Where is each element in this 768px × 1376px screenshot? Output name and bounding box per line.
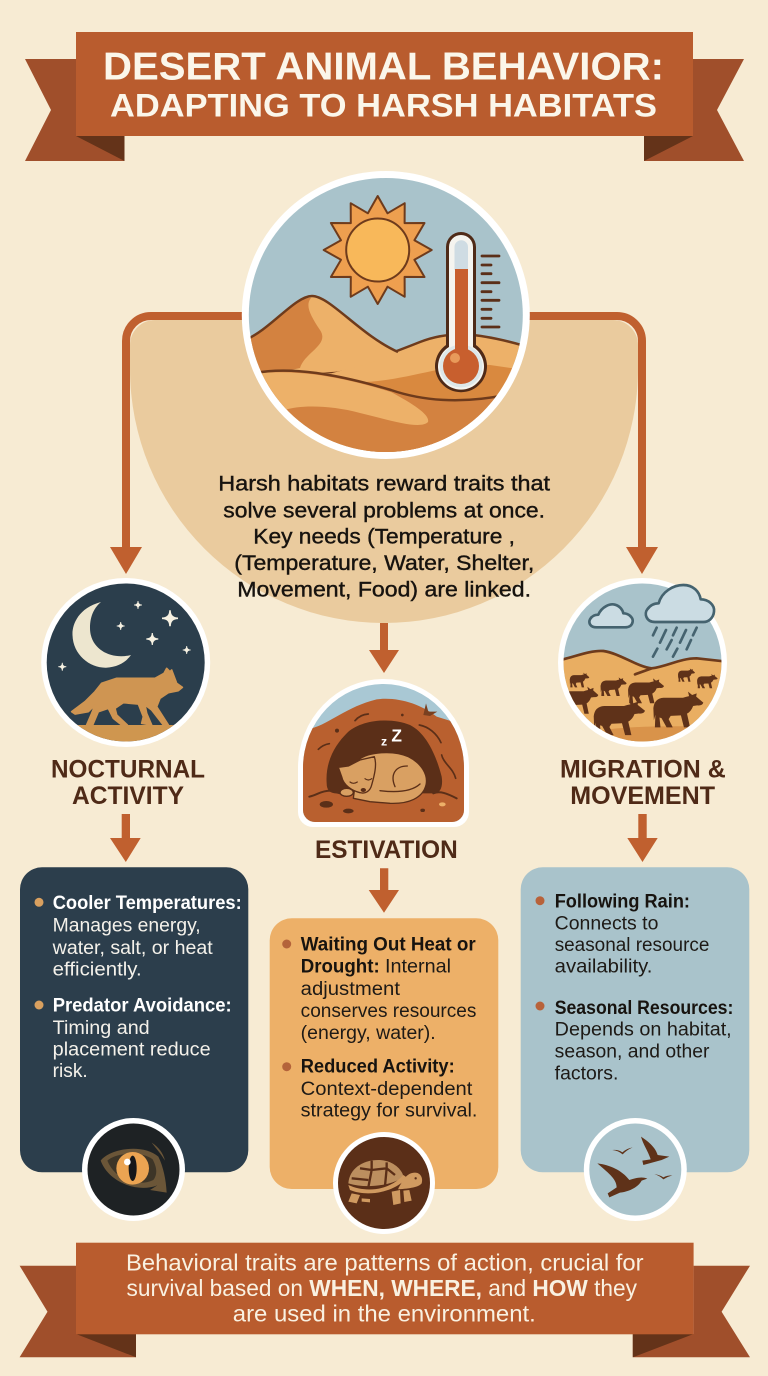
heading: nocturnal activity: ACTIVITY [72,782,184,810]
icon: sleep letters: Z [391,726,402,746]
arrow: right branch [626,547,658,574]
heading: estivation: ESTIVATION [315,836,458,864]
bullet: predator avoidance: placement reduce [53,1040,211,1061]
bullet: predator avoidance: Timing and [53,1018,150,1039]
icon: sleep letters: z [381,734,387,748]
bullet: following rain: Connects to [555,913,658,934]
bullet: cooler temperatures: Cooler Temperatures: [53,893,242,914]
bullet: predator avoidance: Predator Avoidance: [53,996,232,1017]
heading: migration and movement [560,755,726,810]
bullet: cooler temperatures: efficiently. [53,960,142,981]
footer text: survival based on WHEN, WHERE, and HOW they [126,1275,637,1301]
icon: night sky with fox [40,578,210,755]
bullet: waiting out heat or drought [282,935,476,1044]
text block: central intro: solve several problems at once. [223,498,545,522]
icon: sleeping animal [338,753,426,803]
text block: central intro: (Temperature, Water, Shelter, [234,551,534,575]
bullet: predator avoidance [34,996,232,1082]
icon: large rain cloud [646,585,714,622]
footer text: are used in the environment. [233,1301,536,1327]
icon: burrow with sleeping animal [298,679,469,827]
panel: central intro shape with branching connector [110,316,658,623]
icon: flying birds [584,1118,687,1221]
bullet: seasonal resources: season, and other [555,1041,710,1062]
bullet: reduced activity: Context-dependent [301,1079,473,1100]
panel: nocturnal activity details [20,867,248,1172]
icon: herd of animals [562,668,718,735]
bullet: following rain [536,891,709,978]
text block: central intro: Key needs (Temperature , [253,524,515,548]
footer text: Behavioral traits are patterns of action, crucial for [126,1250,644,1276]
title line 1: DESERT ANIMAL BEHAVIOR: [103,46,664,88]
heading: nocturnal activity [51,755,205,810]
bullet: seasonal resources: factors. [555,1063,618,1084]
bullet: waiting out heat or drought: (energy, water). [301,1023,436,1044]
heading: migration and movement: MIGRATION & [560,755,726,783]
icon: thermometer [435,232,499,392]
icon: small cloud [589,604,633,627]
title banner [25,32,744,161]
bullet: seasonal resources: Depends on habitat, [555,1020,732,1041]
icon: rain clouds and migrating herd [558,578,728,750]
bullet: waiting out heat or drought: conserves resources [301,1001,476,1022]
arrow: migration to panel [627,814,658,862]
icon: sand dunes [250,294,520,452]
bullet: cooler temperatures: Manages energy, [53,916,201,937]
icon: sand hills [564,652,722,742]
bullet: following rain: availability. [555,957,652,978]
bullet: reduced activity: strategy for survival. [301,1101,477,1122]
text block: central intro: Movement, Food) are linked. [237,578,531,602]
panel: estivation details [270,918,498,1189]
bullet: reduced activity [282,1057,477,1122]
icon: crescent moon [72,602,131,668]
icon: sun [324,196,432,304]
arrow: left branch [110,547,142,574]
icon: fox silhouette [72,668,182,725]
icon: tortoise [333,1132,435,1234]
text block: central intro: Harsh habitats reward traits that [218,472,550,496]
heading: migration and movement: MOVEMENT [570,782,715,810]
footer banner [20,1243,750,1357]
icon: rain [653,628,697,657]
arrow: nocturnal to panel [110,814,141,862]
icon: cave hollow [327,720,442,793]
icon: stars [58,601,191,671]
title line 2: ADAPTING TO HARSH HABITATS [110,88,657,124]
bullet: following rain: seasonal resource [555,935,709,956]
icon: sun, dunes and thermometer [242,171,530,480]
heading: nocturnal activity: NOCTURNAL [51,755,205,783]
icon: soil [303,698,464,822]
bullet: waiting out heat or drought: Drought: [301,957,380,978]
bullet: cooler temperatures [34,893,242,981]
arrow: estivation to panel [369,868,399,913]
bullet: seasonal resources [536,998,733,1084]
icon: animal eye [82,1118,185,1221]
text block: central intro [218,472,550,602]
bullet: reduced activity: Reduced Activity: [301,1057,455,1078]
arrow: centre branch [369,623,399,673]
bullet: waiting out heat or drought: Waiting Out Heat or [301,935,476,956]
bullet: waiting out heat or drought: Internal [385,957,451,978]
bullet: waiting out heat or drought: adjustment [301,979,401,1000]
bullet: cooler temperatures: water, salt, or heat [52,938,213,959]
bullet: predator avoidance: risk. [53,1061,88,1082]
footer text [126,1250,644,1327]
icon: sleep letters [382,730,402,746]
bullet: following rain: Following Rain: [555,891,690,912]
bullet: seasonal resources: Seasonal Resources: [555,998,733,1019]
panel: migration details [521,867,749,1172]
